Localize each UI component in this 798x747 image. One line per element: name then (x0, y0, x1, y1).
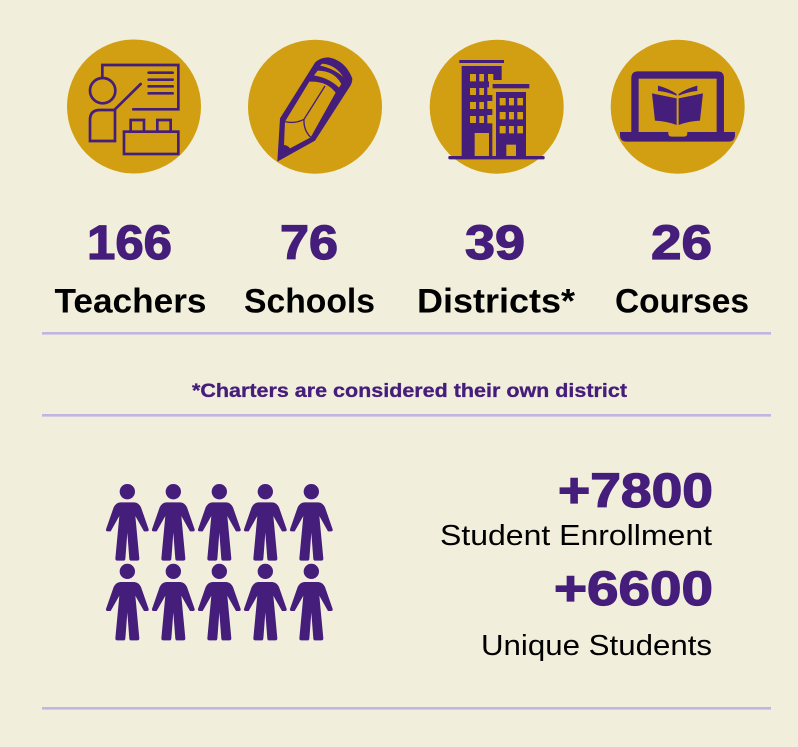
stat: 166 teachers: 166 (87, 217, 172, 270)
stat: student enrollment: Student Enrollment (440, 520, 712, 552)
stat: 26 courses (615, 217, 749, 321)
stat: student enrollment: +7800 (558, 465, 713, 518)
stat: 166 teachers (54, 217, 206, 321)
stat: 166 teachers: Teachers (54, 283, 206, 321)
stat: 39 districts (417, 217, 576, 321)
stat: unique students: Unique Students (481, 630, 712, 662)
stat: 26 courses: 26 (651, 217, 712, 270)
stat: 76 schools: 76 (280, 217, 338, 270)
stat: 39 districts: Districts* (417, 283, 576, 321)
stat: 76 schools (244, 217, 375, 321)
stat: unique students: +6600 (554, 563, 713, 616)
icon: group of ten students (106, 484, 333, 640)
stat: 76 schools: Schools (244, 283, 375, 321)
icon: pencil (248, 40, 382, 174)
icon: laptop with book (611, 40, 745, 174)
icon: teacher at a board (67, 40, 201, 174)
stat: student enrollment (440, 465, 713, 552)
icon: buildings (430, 40, 564, 174)
stat: unique students (481, 563, 713, 662)
stat: 39 districts: 39 (465, 217, 525, 270)
footnote: *Charters are considered their own district (192, 380, 628, 402)
stat: 26 courses: Courses (615, 283, 749, 321)
